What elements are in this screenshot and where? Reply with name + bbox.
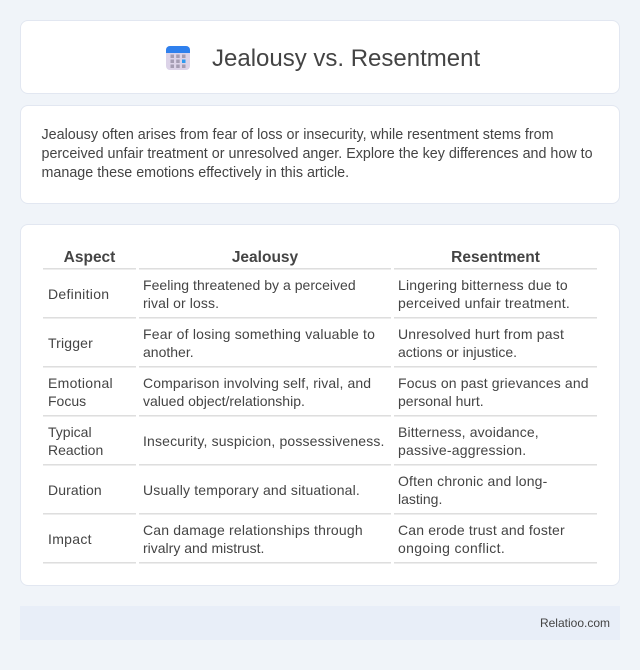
row: Impact: Impact <box>48 531 92 547</box>
comparison table: Comparison involving self, rival, and <box>143 375 371 391</box>
footer bar <box>20 606 620 640</box>
intro text: manage these emotions effectively in this article. <box>42 165 349 181</box>
comparison table: Feeling threatened by a perceived <box>143 277 356 293</box>
comparison table: Lingering bitterness due to <box>398 277 568 293</box>
comparison table: Can erode trust and foster <box>398 522 565 538</box>
comparison table: personal hurt. <box>398 393 484 409</box>
row: Definition: Definition <box>48 286 109 302</box>
comparison table: perceived unfair treatment. <box>398 295 570 311</box>
row: Typical Reaction: Typical <box>48 424 92 440</box>
comparison table: valued object/relationship. <box>143 393 305 409</box>
comparison table: ongoing conflict. <box>398 540 505 556</box>
row: Emotional Focus: Focus <box>48 393 86 409</box>
comparison table: Unresolved hurt from past <box>398 326 564 342</box>
comparison table: actions or injustice. <box>398 344 517 360</box>
intro text <box>42 127 593 181</box>
comparison table: Usually temporary and situational. <box>143 482 360 498</box>
comparison table: Bitterness, avoidance, <box>398 424 539 440</box>
comparison table: another. <box>143 344 194 360</box>
table card <box>20 224 620 586</box>
comparison table: rivalry and mistrust. <box>143 540 264 556</box>
intro text: Jealousy often arises from fear of loss or insecurity, while resentment stems from <box>42 127 554 143</box>
row: Emotional Focus <box>48 375 113 409</box>
icon: calendar <box>166 46 190 70</box>
intro card <box>20 105 620 204</box>
comparison table: Often chronic and long- <box>398 473 547 489</box>
comparison table: Fear of losing something valuable to <box>143 326 375 342</box>
row: Duration: Duration <box>48 482 102 498</box>
intro text: perceived unfair treatment or unresolved anger. Explore the key differences and how to <box>42 146 593 162</box>
comparison table: Insecurity, suspicion, possessiveness. <box>143 433 385 449</box>
row: Typical Reaction: Reaction <box>48 442 103 458</box>
header: Jealousy: Jealousy <box>232 249 298 266</box>
title: Jealousy vs. Resentment <box>212 45 480 72</box>
row: Trigger: Trigger <box>48 335 93 351</box>
header: Resentment: Resentment <box>451 249 540 266</box>
comparison table: Can damage relationships through <box>143 522 363 538</box>
comparison table: lasting. <box>398 491 442 507</box>
row: Emotional Focus: Emotional <box>48 375 113 391</box>
header card <box>20 20 620 94</box>
comparison table: rival or loss. <box>143 295 219 311</box>
comparison table: Focus on past grievances and <box>398 375 589 391</box>
row: Typical Reaction <box>48 424 103 458</box>
header: Aspect: Aspect <box>64 249 115 266</box>
comparison table: passive-aggression. <box>398 442 526 458</box>
footer text: Relatioo.com <box>540 616 610 630</box>
